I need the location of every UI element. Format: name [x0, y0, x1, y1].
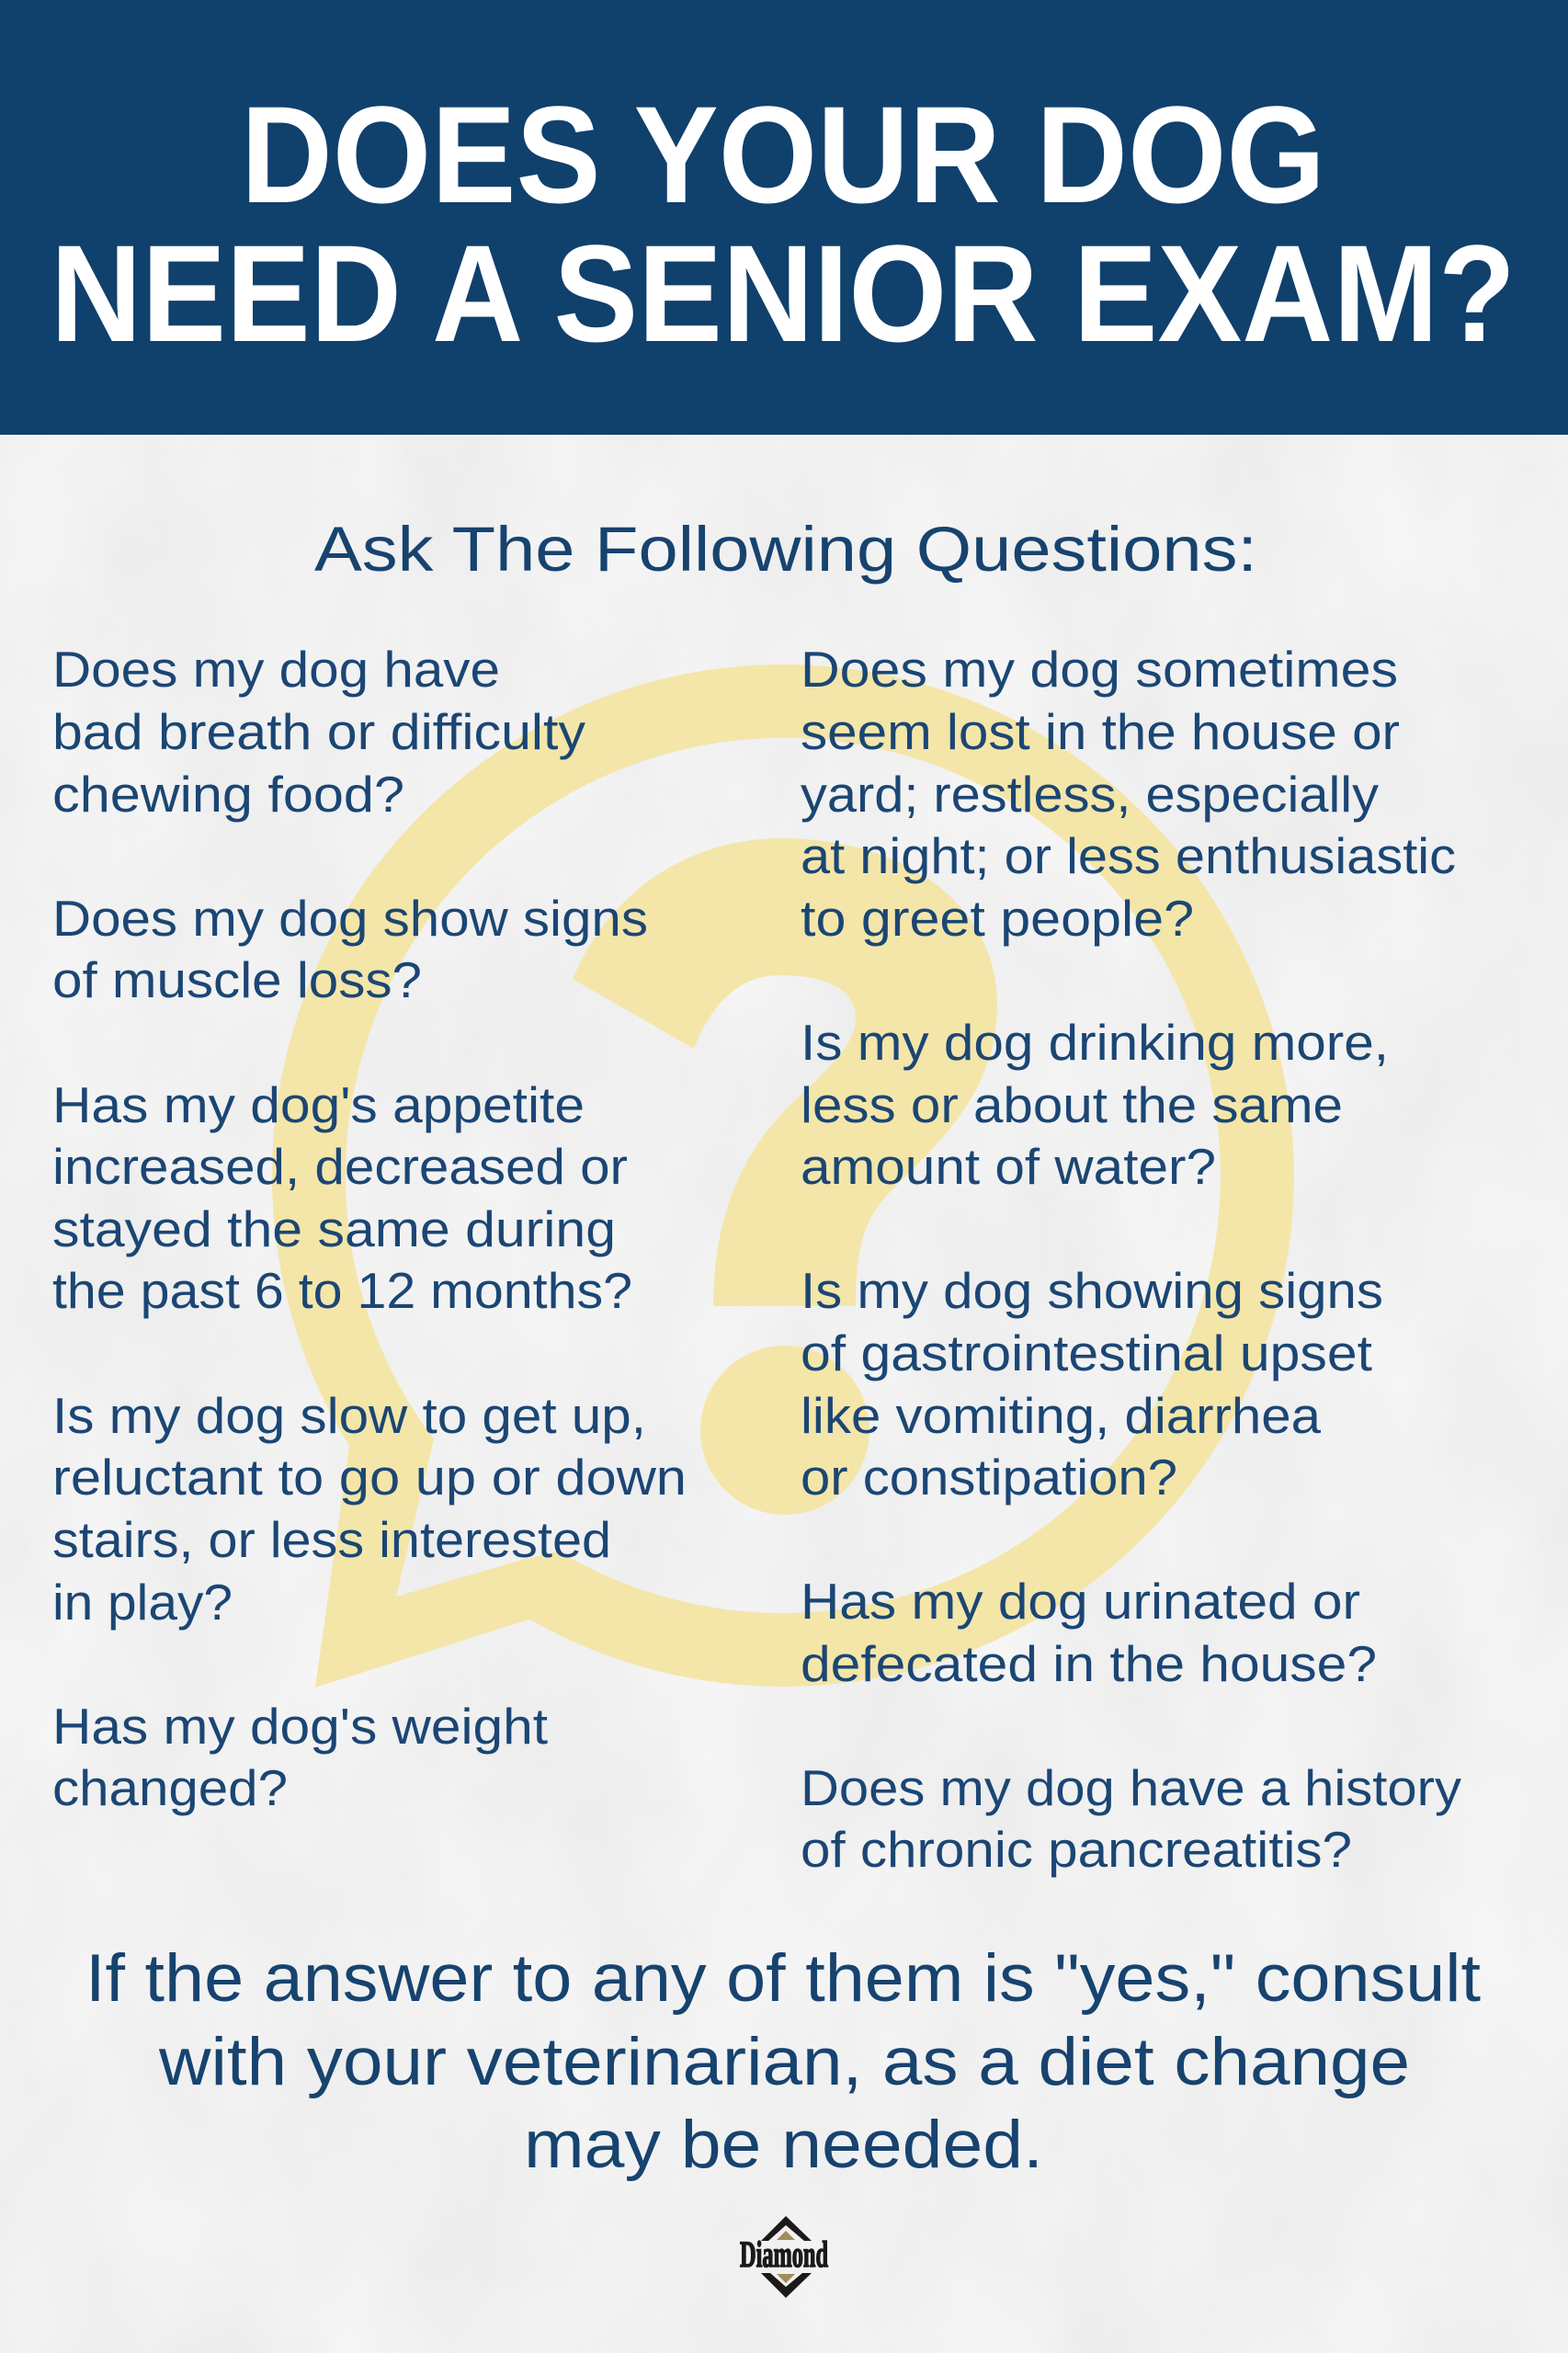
question: bad breath: bad breath or difficulty	[52, 703, 586, 760]
question: disorientation: to greet people?	[801, 890, 1194, 947]
question: weight: Has my dog's weight	[52, 1698, 548, 1755]
conclusion text: with your veterinarian, as a diet change	[158, 2025, 1410, 2099]
left column of questions	[52, 641, 687, 1816]
question: mobility	[52, 1387, 687, 1631]
question: appetite	[52, 1076, 632, 1319]
question: muscle loss: of muscle loss?	[52, 951, 422, 1008]
question: appetite: Has my dog's appetite	[52, 1076, 585, 1133]
subheading: Ask The Following Questions:	[314, 514, 1257, 585]
question: bad breath: Does my dog have	[52, 641, 500, 698]
question: muscle loss: Does my dog show signs	[52, 890, 648, 947]
question: gastrointestinal upset: like vomiting, diarrhea	[801, 1387, 1321, 1444]
header band	[0, 0, 1568, 435]
conclusion text	[85, 1941, 1481, 2182]
title	[51, 77, 1516, 370]
question: water intake: less or about the same	[801, 1076, 1343, 1133]
question: gastrointestinal upset	[801, 1262, 1383, 1506]
question: water intake	[801, 1014, 1389, 1195]
question: water intake: amount of water?	[801, 1138, 1216, 1195]
question: pancreatitis	[801, 1759, 1462, 1878]
conclusion text: If the answer to any of them is "yes," consult	[85, 1941, 1481, 2016]
question: weight	[52, 1698, 548, 1816]
question: bad breath	[52, 641, 586, 823]
question: appetite: increased, decreased or	[52, 1138, 628, 1195]
question: gastrointestinal upset: of gastrointestinal upset	[801, 1324, 1372, 1381]
question: disorientation: seem lost in the house or	[801, 703, 1400, 760]
question: house soiling	[801, 1573, 1377, 1692]
logo: Diamond	[740, 2216, 828, 2298]
question: bad breath: chewing food?	[52, 766, 404, 823]
question: weight: changed?	[52, 1759, 288, 1816]
title: DOES YOUR DOG	[241, 77, 1325, 232]
question: disorientation	[801, 641, 1456, 947]
right column of questions	[801, 641, 1462, 1878]
question: water intake: Is my dog drinking more,	[801, 1014, 1389, 1071]
question: disorientation: at night; or less enthusiastic	[801, 827, 1456, 884]
question: appetite: the past 6 to 12 months?	[52, 1262, 632, 1319]
question: pancreatitis: Does my dog have a history	[801, 1759, 1462, 1816]
question: mobility: stairs, or less interested	[52, 1511, 611, 1568]
question: disorientation: Does my dog sometimes	[801, 641, 1398, 698]
question: pancreatitis: of chronic pancreatitis?	[801, 1821, 1352, 1878]
question: appetite: stayed the same during	[52, 1200, 616, 1257]
question: mobility: in play?	[52, 1574, 233, 1631]
question: muscle loss	[52, 890, 648, 1008]
question: house soiling: Has my dog urinated or	[801, 1573, 1360, 1630]
conclusion text: may be needed.	[524, 2108, 1043, 2182]
question: disorientation: yard; restless, especially	[801, 766, 1380, 823]
question: mobility: reluctant to go up or down	[52, 1449, 687, 1506]
logo: Diamond: Diamond	[740, 2234, 828, 2275]
icon: question mark speech bubble watermark	[272, 665, 1294, 1688]
question: house soiling: defecated in the house?	[801, 1635, 1377, 1692]
question: gastrointestinal upset: or constipation?	[801, 1449, 1177, 1506]
question: mobility: Is my dog slow to get up,	[52, 1387, 646, 1444]
question: gastrointestinal upset: Is my dog showing signs	[801, 1262, 1383, 1319]
